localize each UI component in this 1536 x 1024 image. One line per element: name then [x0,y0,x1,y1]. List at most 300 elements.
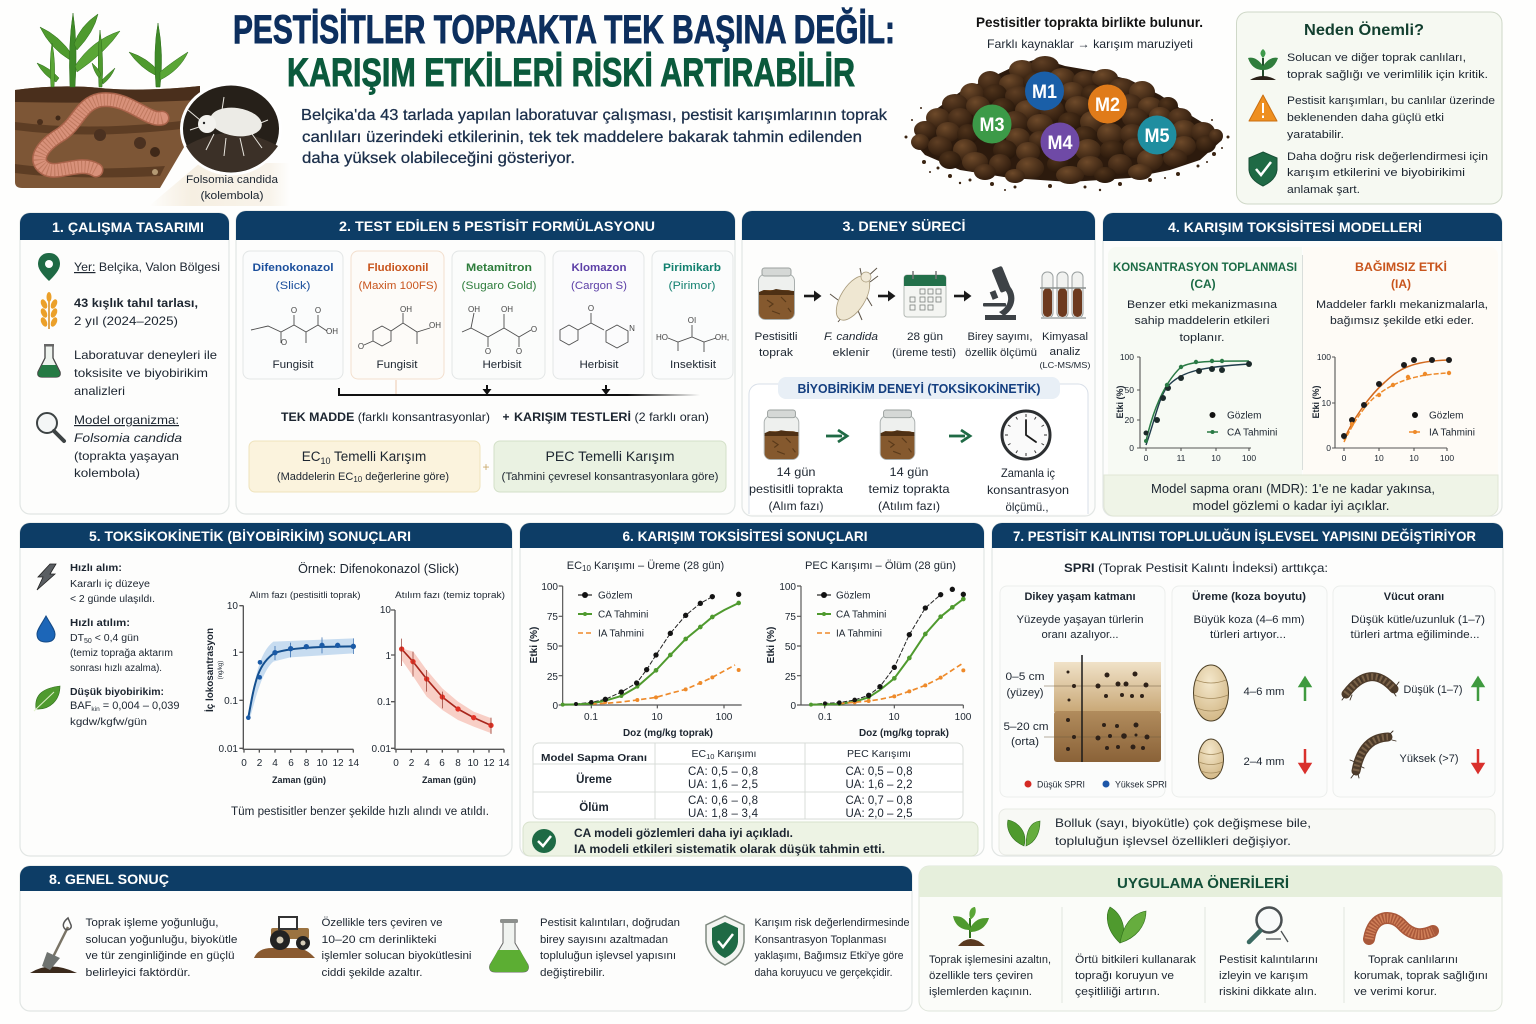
icon: soil mound [904,56,1230,191]
panel: independent action [1302,247,1498,475]
legend: SPRI [1024,780,1167,790]
chart: EC10 reproduction: Karışımı – Üreme (28 gün) [591,560,724,572]
legend: CA: Gözlem [1227,410,1261,422]
card: body ratio [1333,586,1495,797]
card: Klomazon: Klomazon [572,262,627,274]
text: conclusion: Tüm pestisitler benzer şekilde hızlı alındı ve atıldı. [231,806,489,818]
card: cocoon size [1172,586,1327,797]
card: body ratio: türleri artma eğiliminde... [1350,629,1480,641]
chart: PEC mortality: PEC Karışımı – Ölüm (28 gün) [805,560,956,572]
card: Pirimikarb: HO [656,333,668,342]
icon: leaves [1008,820,1040,846]
legend: IA: IA Tahmini [1429,428,1475,438]
text: model organism [74,413,182,480]
chart: IA fit: 100 [1440,453,1454,463]
text: residues: değiştirebilir. [540,967,605,979]
chart: IA fit: 100 [1317,352,1331,362]
text: lab analyses: Laboratuvar deneyleri ile [74,348,217,362]
text: pile heading: Pestisitler toprakta birlikte bulunur. [976,14,1203,30]
chart: CA fit: 0 [1129,443,1134,453]
text: low bioaccumulation: Düşük biyobirikim: [70,687,164,698]
text: tillage: solucan yoğunluğu, biyokütle [86,934,238,946]
title: PESTİSİTLER TOPRAKTA TEK BAŞINA DEĞİL: [233,6,895,52]
panel 2: tested pesticides [236,211,735,514]
icon: M2 marker [1088,84,1127,124]
chart: IA fit: Etki (%) [1311,385,1321,419]
chart: IA fit: 0 [1342,453,1347,463]
heading: section 6 [520,523,984,548]
heading: section 7: 7. PESTİSİT KALINTISI TOPLULUĞUN İŞLEVSEL YAPISINI DEĞİŞTİRİYOR [1013,527,1476,544]
text: risk assessment: daha koruyucu ve gerçekçidir. [754,967,892,979]
chart: EC10 reproduction: 75 [547,612,558,623]
text: rapid elimination: sonrası hızlı azalma). [70,663,162,674]
text: inversion tillage: Özellikle ters çeviren ve [322,917,442,929]
text: monitoring: Pestisit kalıntılarını [1219,954,1318,966]
callout: model verdict: CA modeli gözlemleri daha iyi açıkladı. [574,828,793,840]
text: rapid elimination: (temiz toprağa aktarım [70,648,173,659]
chart: IA fit [1311,352,1475,463]
chart: elimination phase: 14 [498,758,510,769]
chart: EC10 reproduction [529,560,742,739]
chart: uptake phase: 10 [316,758,328,769]
chart: IA fit: 0 [1326,443,1331,453]
illustration: soil cross-section with plants, earthworm and Folsomia candida [15,13,290,206]
legend: CA: CA Tahmini [1227,428,1277,438]
chart: uptake phase: 14 [348,758,359,769]
panel: why it matters [1236,12,1502,204]
arrow: down [1473,749,1483,772]
chart: IA fit: 10 [1409,453,1419,463]
icon: soil pile with five pesticides [904,56,1230,191]
chart: EC10 reproduction: 100 [716,712,733,723]
chart: elimination phase: 4 [424,758,430,769]
card: cocoon size: 4–6 mm [1244,686,1284,698]
text: cover crops [1075,954,1197,998]
text: single and mixture tests: TEK MADDE (farklı konsantrasyonlar) [281,410,490,424]
card: Pirimikarb: OI [688,316,696,325]
arrow [949,430,970,442]
text: reduce tillage: işlemlerden kaçının. [929,986,1032,998]
legend: SPRI: Yüksek SPRI [1115,780,1167,790]
chart: CA fit: 20 [1125,415,1134,425]
box: EC10 mixture: (Maddelerin EC [277,471,353,483]
arrow: up [1473,678,1483,701]
legend: EC10 chart: IA Tahmini [598,628,644,640]
chart: PEC mortality: 100 [955,712,972,723]
panel 8: general conclusion [20,866,912,1011]
heading: bioaccumulation: BİYOBİRİKİM DENEYİ (TOKSİKOKİNETİK) [798,381,1040,396]
legend: PEC chart [817,590,886,640]
card: vertical layer: 0–5 cm [1006,671,1044,683]
heading: section 7 [992,523,1503,548]
text: model organism: kolembola) [74,466,140,480]
text: organism label [186,174,279,202]
text: location: Yer: Belçika, Valon Bölgesi [74,260,220,274]
text: step captions: Birey sayımı, [968,331,1032,343]
text: residues: Pestisit kalıntıları, doğrudan [540,917,680,929]
icon: shield [1249,152,1277,186]
text: introduction [301,107,888,167]
text: reason 2: beklenenden daha güçlü etki [1287,112,1444,124]
card: vertical layer [1000,586,1167,797]
callout: MDR: model gözlemi o kadar iyi açıklar. [1192,499,1390,513]
text: reduce tillage: Toprak işlemesini azaltın, [929,954,1051,966]
text: single and mixture tests: KARIŞIM TESTLERİ (2 farklı oran) [514,409,709,424]
icon: M4 marker: M4 [1048,133,1073,154]
heading: section 4 [1103,213,1502,241]
table: model deviation ratio: Karışımı [714,748,756,760]
icon: protection shield [706,916,744,965]
text: rapid elimination [70,618,173,674]
chart: elimination phase: 12 [483,758,495,769]
table: model deviation ratio: UA: 2,0 – 2,5 [846,808,912,820]
card: Metamitron: OH [501,305,513,314]
heading: recommendations: UYGULAMA ÖNERİLERİ [1117,875,1289,892]
chart: elimination phase: 0.1 [377,697,391,708]
chart: CA fit: 100 [1242,453,1256,463]
icon: springtail in circle [180,82,282,176]
legend: PEC chart: IA Tahmini [836,628,882,640]
heading: section 4: 4. KARIŞIM TOKSİSİTESİ MODELLERİ [1168,219,1422,235]
card: body ratio: Yüksek (>7) [1400,753,1458,765]
text: rapid uptake [70,563,155,605]
icon: monitoring magnifier [1249,908,1288,942]
text: reason 3: anlamak şart. [1287,184,1360,196]
panel: bioaccumulation experiment [749,377,1088,514]
panel: concentration addition: (CA) [1190,277,1216,291]
icon: test tubes [1040,272,1086,318]
axis label: internal concentration: (ng/kg) [218,661,224,679]
card: Metamitron: OH [468,305,480,314]
card: Difenokonazol: (Slick) [276,280,310,292]
text: reason 2 [1287,95,1495,141]
chart: EC10 reproduction: Doz (mg/kg toprak) [623,728,713,739]
panel 3: experiment process [742,211,1095,516]
heading: example: Örnek: Difenokonazol (Slick) [298,562,459,576]
text: bioaccumulation captions: pestisitli toprakta [749,482,843,496]
chart: CA fit: 11 [1177,453,1186,463]
text: introduction: canlıları üzerindeki etkilerinin, tek tek maddelere bakarak tahmin edilenden [302,129,862,146]
text: SPRI intro: SPRI (Toprak Pestisit Kalıntı İndeksi) arttıkça: [1064,561,1328,575]
card: Fludioxonil: OH [400,305,412,314]
chart: elimination phase: 10 [467,758,479,769]
icon: cover crops leaf [1107,907,1146,943]
chart: elimination phase: 10 [380,605,391,616]
panel: independent action: BAĞIMSIZ ETKİ [1355,259,1447,274]
text: monitoring: izleyin ve karışım [1219,970,1308,982]
title: KARIŞIM ETKİLERİ RİSKİ ARTIRABİLİR [287,51,855,95]
table: model deviation ratio: CA: 0,5 – 0,8 [846,766,912,778]
text: lab analyses: analizleri [74,384,125,398]
card: Difenokonazol: O [281,338,287,347]
illustration: soil profile [1044,655,1161,762]
heading: section 3: 3. DENEY SÜRECİ [842,218,966,234]
box: PEC mixture: (Tahmini çevresel konsantrasyonlara göre) [502,471,718,483]
icon: low ratio springtail [1342,674,1399,700]
table: model deviation ratio: UA: 1,6 – 2,2 [846,779,912,791]
card: body ratio: Düşük (1–7) [1404,684,1462,696]
text: bioaccumulation captions: konsantrasyon [987,483,1069,497]
card: vertical layer: oranı azalıyor... [1042,629,1118,641]
card: Klomazon: Herbisit [580,359,618,371]
chart: uptake phase: 10 [227,601,238,612]
text: risk assessment: yaklaşımı, Bağımsız Etki'ye göre [754,950,904,962]
callout: functional traits: Bolluk (sayı, biyokütle) çok değişmese bile, [1055,816,1311,830]
chart: EC10 reproduction: 100 [541,582,558,593]
chart: PEC mortality: 50 [785,642,796,653]
chart: CA fit: 10 [1211,453,1221,463]
card: vertical layer: Yüzeyde yaşayan türlerin [1016,614,1144,626]
chart: uptake phase: 1 [232,648,238,659]
icon: large cocoon [1194,665,1228,721]
box: EC10 mixture: Temelli Karışım [330,449,426,464]
heading: recommendations [919,866,1502,897]
card: Difenokonazol [243,251,343,379]
card: vertical layer: 5–20 cm [1004,721,1048,733]
callout: MDR: Model sapma oranı (MDR): 1'e ne kadar yakınsa, [1151,482,1435,496]
card: Fludioxonil: (Maxim 100FS) [358,280,438,292]
icon: tractor [254,917,315,958]
text: protect organisms: korumak, toprak sağlığını [1354,970,1488,982]
axis label: internal concentration [203,628,224,712]
icon: M3 marker: M3 [980,115,1004,136]
text: reason 3 [1287,151,1488,196]
text: fields [74,296,198,328]
table: model deviation ratio: CA: 0,6 – 0,8 [688,795,758,807]
card: vertical layer: Dikey yaşam katmanı [1024,591,1136,603]
card: Difenokonazol: OH [326,327,338,336]
card: Pirimikarb: (Pirimor) [668,280,716,292]
text: rapid elimination: 50 [84,638,92,645]
text: reason 2: yaratabilir. [1287,129,1344,141]
text: rapid uptake: Kararlı iç düzeye [70,579,150,590]
text: inversion tillage: ciddi şekilde azaltır. [322,967,422,979]
chart: CA fit: Etki (%) [1115,385,1125,419]
text: risk assessment [754,917,910,979]
legend: EC10 chart [578,590,648,640]
text: bioaccumulation captions: 14 gün [776,465,816,479]
text: model organism: (toprakta yaşayan [74,449,179,463]
legend: SPRI: Düşük SPRI [1037,780,1085,790]
text: step captions [754,331,1091,370]
icon: sprout [953,907,989,946]
heading: section 3 [742,211,1095,240]
text: reduce tillage [929,954,1051,998]
icon: label backdrop [149,163,290,206]
text: rapid elimination: Hızlı atılım: [70,618,130,629]
chart: EC10 reproduction: 10 [582,564,591,573]
icon: M1 marker [1025,72,1064,110]
icon: clock [1002,411,1050,459]
box: EC10 mixture: değerlerine göre) [362,471,449,483]
table: model deviation ratio: CA: 0,5 – 0,8 [688,766,758,778]
card: Fludioxonil: O [358,342,364,351]
card: Fludioxonil: Fungisit [376,359,418,371]
box: EC10 mixture [249,441,480,492]
box: PEC mixture [494,441,726,492]
chart: IA fit: 10 [1322,398,1331,408]
heading: section 2: 2. TEST EDİLEN 5 PESTİSİT FORMÜLASYONU [339,218,655,234]
chart: uptake phase: 0 [241,758,247,769]
text: inversion tillage: işlemler solucan biyokütlesini [322,950,472,962]
card: Metamitron: O [531,325,537,334]
card: Metamitron [452,251,545,379]
table: model deviation ratio: Model Sapma Oranı [541,752,647,764]
callout: MDR [1104,475,1498,516]
axis label: internal concentration: İç lokosantrasyon [203,628,216,712]
icon: springtail [830,268,878,326]
text: pile heading: Farklı kaynaklar → karışım maruziyeti [987,37,1193,51]
chart: elimination phase: Atılım fazı (temiz toprak) [395,590,505,600]
icon: shovel [30,918,77,973]
legend: EC10 chart: Gözlem [598,590,632,602]
text: single and mixture tests [281,409,709,424]
text: rapid uptake: Hızlı alım: [70,563,122,574]
card: Metamitron: Metamitron [466,262,532,274]
chart: CA fit: 0 [1144,453,1149,463]
chart: PEC mortality: 10 [888,712,900,723]
chart: elimination phase [372,590,510,785]
chart: PEC mortality: 0.1 [818,712,832,723]
panel 4: toxicity models [1103,213,1502,516]
chart: uptake phase: 0.1 [224,696,238,707]
text: monitoring [1219,954,1318,998]
table: model deviation ratio: Üreme [576,773,612,786]
card: Metamitron: O [516,347,522,356]
arrow [878,290,896,302]
icon: leaf [34,686,60,711]
card: Pirimikarb: OH, [715,333,729,342]
chart: EC10 reproduction: 0.1 [584,712,598,723]
text: step captions: Pestisitli [754,331,798,343]
chart: uptake phase: 6 [288,758,294,769]
text: organism label: Folsomia candida [186,174,279,186]
card: Pirimikarb [652,251,733,379]
text: model organism: Folsomia candida [74,431,182,445]
text: bioaccumulation captions: 14 gün [890,465,928,479]
heading: section 6: 6. KARIŞIM TOKSİSİTESİ SONUÇLARI [622,528,868,544]
table: model deviation ratio: EC [692,748,706,760]
panel 6: mixture toxicity results [520,523,984,856]
card: cocoon size: Büyük koza (4–6 mm) [1194,614,1304,626]
text: protect organisms: Toprak canlılarını [1368,954,1458,966]
text: reason 3: Daha doğru risk değerlendirmesi için [1287,151,1488,163]
text: bioaccumulation captions: Zamanla iç [1001,466,1055,480]
table: model deviation ratio [533,743,963,820]
card: cocoon size: 2–4 mm [1244,756,1284,768]
chart: CA fit [1115,352,1277,463]
card: Klomazon: (Cargon S) [571,280,627,292]
card: Klomazon: N [629,324,635,333]
icon: wheat [39,292,59,329]
heading: section 2 [236,211,735,240]
panel: concentration addition: sahip maddelerin etkileri [1134,315,1270,327]
text: lab analyses: toksisite ve biyobirikim [74,366,208,380]
icon: seedling [1248,49,1278,80]
chart: uptake phase [219,590,360,785]
text: tillage: belirleyici faktördür. [86,967,190,979]
icon: calendar [904,271,946,317]
arrow [826,430,847,442]
heading: section 5: 5. TOKSİKOKİNETİK (BİYOBİRİKİM) SONUÇLARI [89,528,411,544]
text: inversion tillage: 10–20 cm derinlikteki [322,934,436,946]
icon: magnifier [37,413,64,441]
icon: M3 marker [972,104,1012,144]
chart: EC10 reproduction: 10 [651,712,663,723]
text: step captions: toprak [759,347,794,359]
card: Fludioxonil: OH [429,321,441,330]
text: step captions: F. candida [824,331,878,343]
text: low bioaccumulation: BAF [70,700,91,712]
callout: functional traits [999,809,1495,855]
title [233,6,895,95]
card: Fludioxonil: Fludioxonil [368,262,428,274]
card: Klomazon: O [588,304,594,313]
icon: M5 marker: M5 [1144,126,1170,147]
chart: elimination phase: 1 [385,651,391,662]
chart: PEC mortality: Doz (mg/kg toprak) [859,728,949,739]
text: reason 3: karışım etkilerini ve biyobirikimi [1287,167,1465,179]
card: Difenokonazol: Difenokonazol [252,262,334,274]
text: residues [540,917,680,979]
card: Metamitron: O [485,347,491,356]
icon: worm [1369,918,1433,939]
text: fields: 43 kışlık tahıl tarlası, [74,296,198,310]
panel: independent action: Maddeler farklı mekanizmalarla, [1316,299,1488,311]
box: EC10 mixture: EC [302,449,320,464]
box: PEC mixture: PEC Temelli Karışım [546,449,674,464]
legend: PEC chart: Gözlem [836,590,870,602]
card: Difenokonazol: O [291,306,297,315]
table: model deviation ratio: UA: 1,6 – 2,5 [688,779,758,791]
chart: EC10 reproduction: 25 [547,672,558,683]
icon: location pin [38,253,60,281]
legend: IA [1409,410,1475,438]
panel: concentration addition: Benzer etki mekanizmasına [1127,299,1278,311]
text: step captions: (üreme testi) [892,347,956,359]
icon: plants [37,13,188,87]
icon: check [532,829,556,853]
icon: M4 marker [1040,122,1080,162]
icon: high ratio springtail [1350,731,1396,778]
table: model deviation ratio: UA: 1,8 – 3,4 [688,808,759,820]
chart: PEC mortality [766,560,972,739]
text: cover crops: çeşitliliği artırın. [1075,986,1160,998]
icon: soil block [15,86,200,188]
chart: elimination phase: 0.01 [372,744,391,755]
card: Fludioxonil [351,251,444,379]
chart: EC10 reproduction: 0 [552,701,558,712]
chart: elimination phase: 0 [393,758,399,769]
text: risk assessment: Konsantrasyon Toplanması [754,934,886,946]
arrow [954,290,972,302]
text: rapid uptake: < 2 günde ulaşıldı. [70,594,155,605]
icon: M1 marker: M1 [1032,82,1057,103]
arrow: down [1300,749,1310,772]
legend: IA: Gözlem [1429,410,1463,422]
connector: bracket with arrows [338,380,700,396]
table: model deviation ratio: CA: 0,7 – 0,8 [846,795,912,807]
text: organism label: (kolembola) [200,190,264,202]
text: step captions: (LC-MS/MS) [1040,360,1091,370]
card: Metamitron: (Sugaro Gold) [462,280,536,292]
icon: jar uptake [764,410,799,460]
text: reason 1: toprak sağlığı ve verimlilik için kritik. [1287,69,1488,81]
chart: PEC mortality: 0 [790,701,796,712]
chart: uptake phase: 4 [272,758,278,769]
chart: EC10 reproduction: 50 [547,642,558,653]
chart: uptake phase: 0.01 [219,744,238,755]
